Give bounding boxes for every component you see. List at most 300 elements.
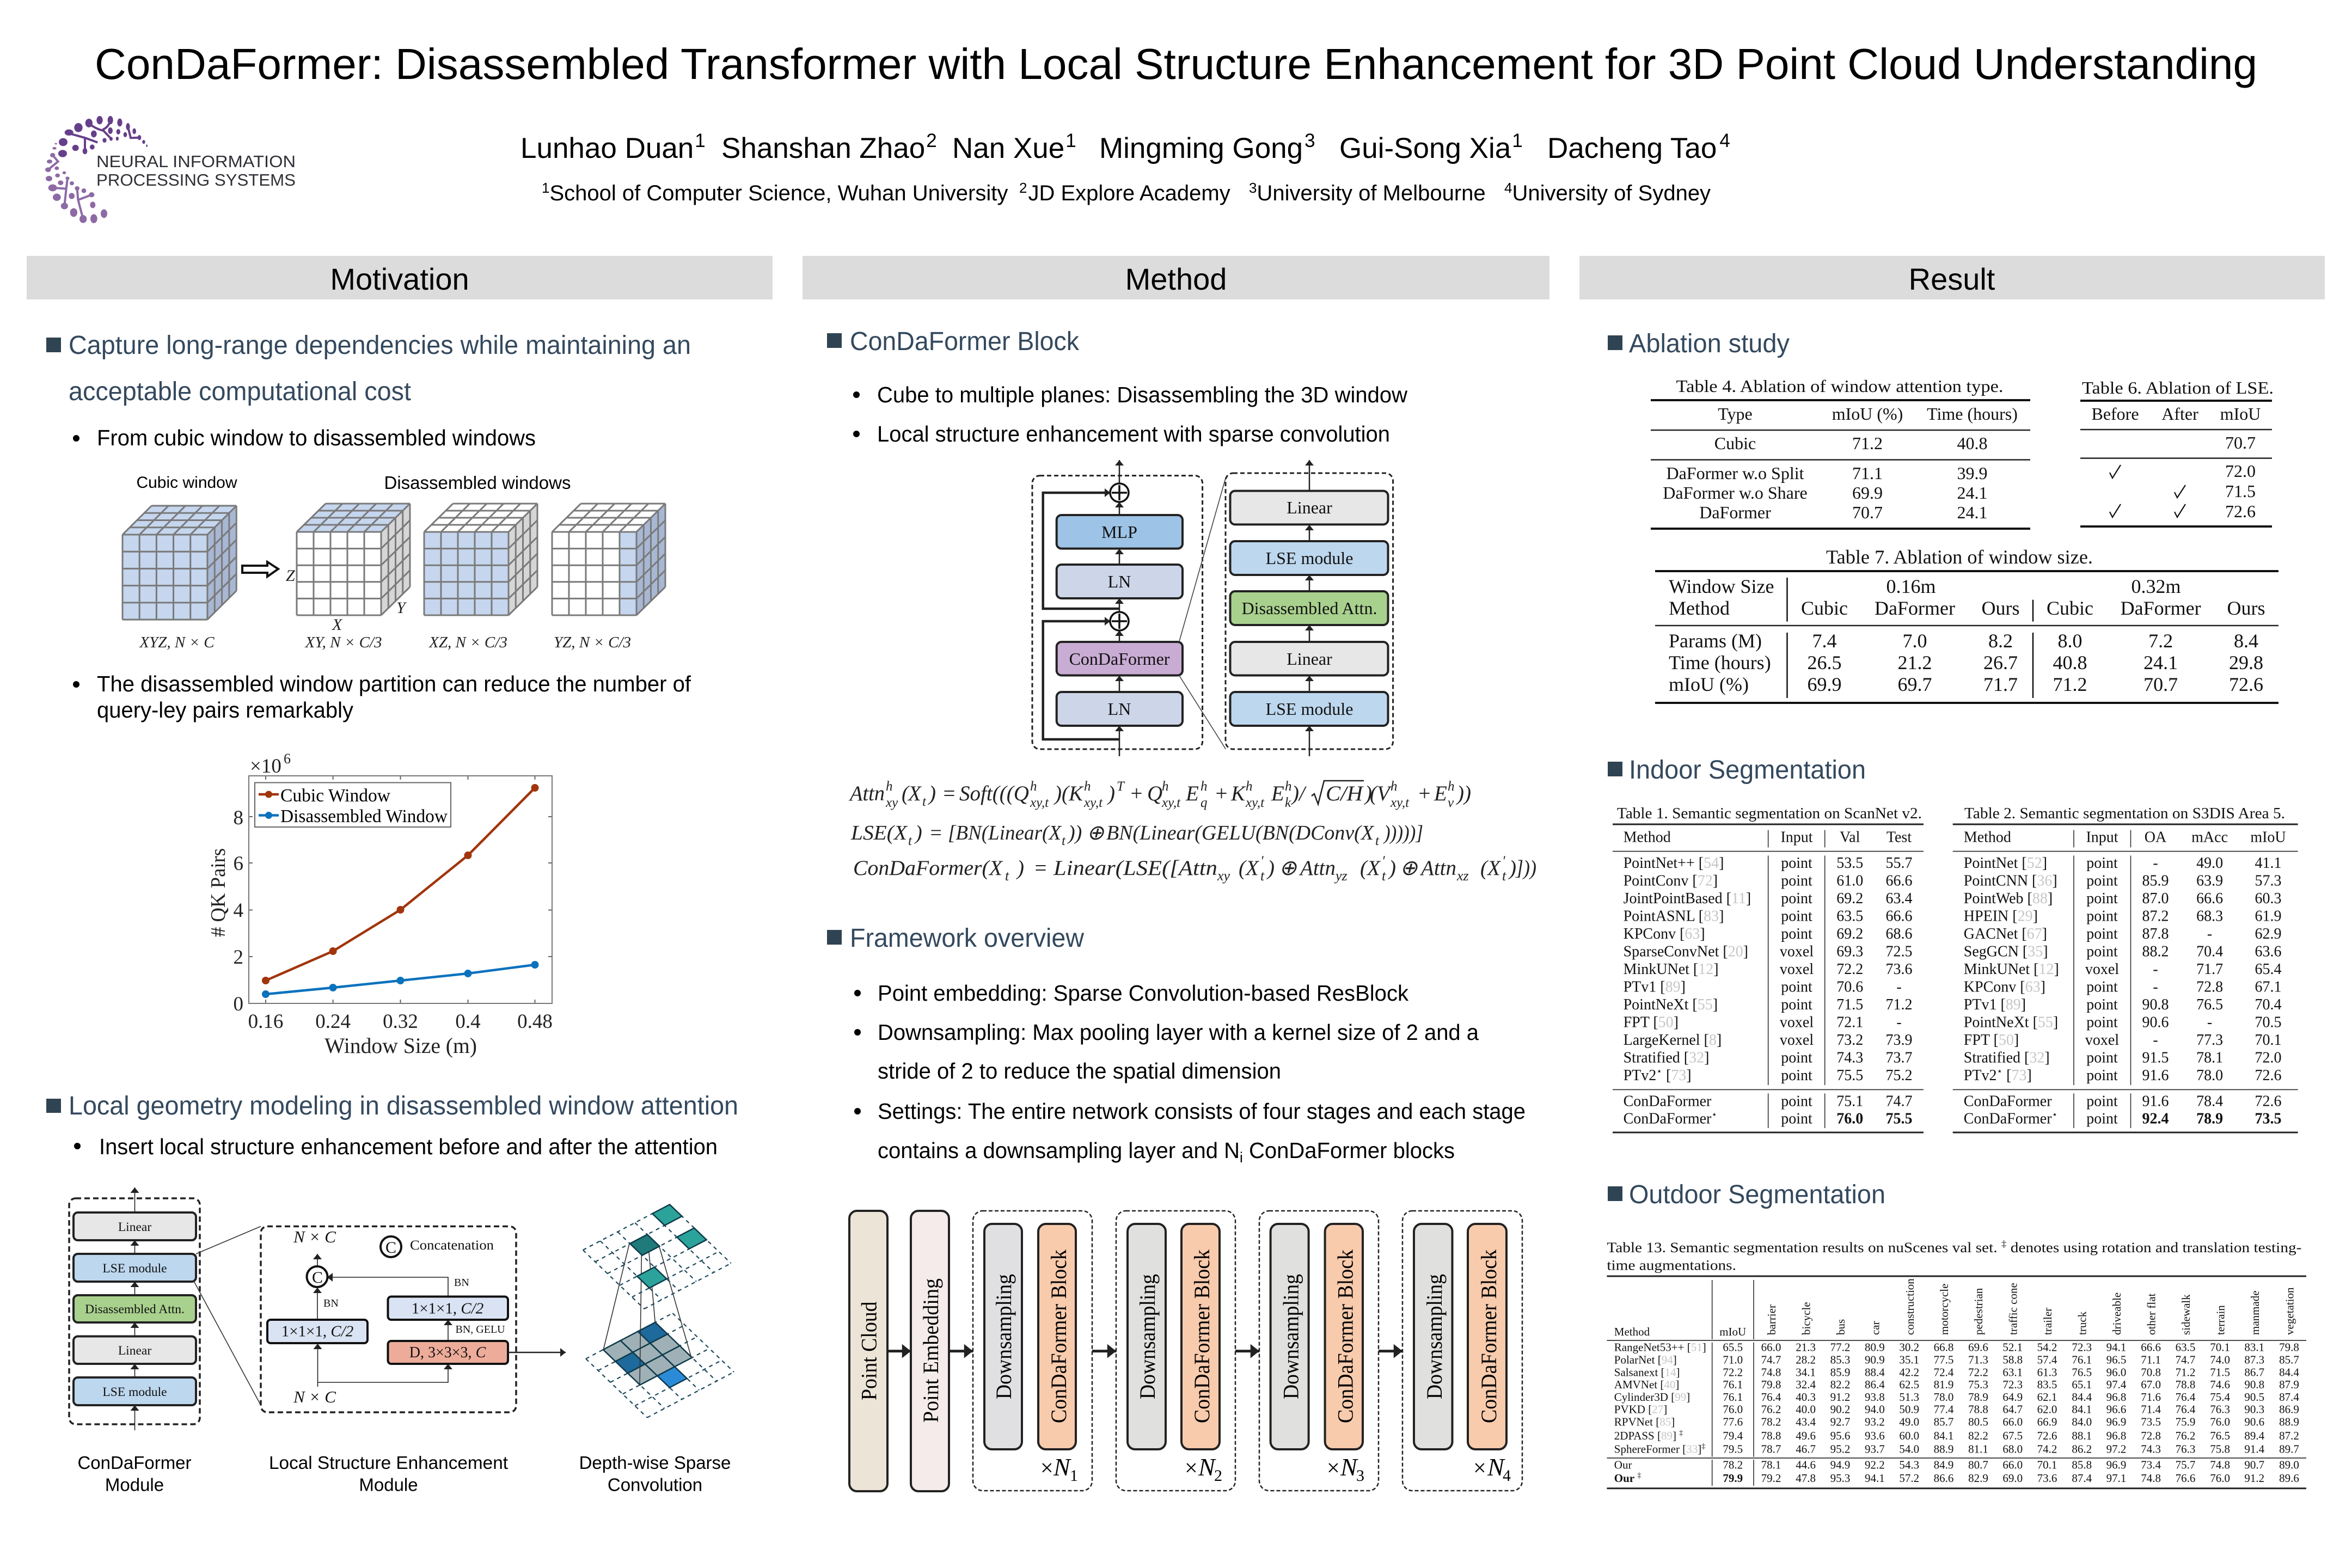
diagram: ConDaFormer module: LSE module <box>102 1261 167 1276</box>
series: disassembled window <box>262 961 539 998</box>
table 13: nuScenes: 76.0 <box>2210 1472 2230 1485</box>
table 13: nuScenes: 85.7 <box>1934 1416 1953 1429</box>
stage 2: ConDaFormer Block <box>1190 1250 1214 1423</box>
table 13: nuScenes: 84.4 <box>2279 1365 2299 1379</box>
diagram: ConDaFormer detail <box>1226 460 1393 756</box>
formula: LSE: [BN(Linear(X <box>948 822 1062 844</box>
table 7: window size: 8.2 <box>1988 630 2013 652</box>
formula: Attn: )/ <box>1291 782 1307 805</box>
table 1: ScanNet v2: 69.3 <box>1836 943 1863 960</box>
rotated column headers: car <box>1869 1321 1882 1335</box>
formula: LSE: t <box>1062 834 1066 848</box>
table 13: nuScenes: 21.3 <box>1796 1341 1816 1354</box>
formula: ConDaFormer: ) <box>1266 856 1275 880</box>
table 7: window size: 7.4 <box>1812 630 1837 652</box>
table 13: nuScenes: 65.1 <box>2072 1378 2092 1391</box>
table 13: nuScenes: 76.4 <box>2176 1391 2196 1404</box>
table 13: nuScenes: 74.8 <box>2210 1458 2230 1471</box>
table 13: nuScenes: 72.8 <box>2141 1429 2161 1442</box>
bullets: framework description: i <box>1240 1149 1243 1166</box>
figure: cubic and disassembled windows: XYZ, N × C <box>139 634 215 651</box>
formula: Attn: )) <box>1456 782 1471 805</box>
diagram: local structure enhancement module: 1×1×1, C/2 <box>412 1300 483 1318</box>
formula: ConDaFormer: t <box>1502 868 1506 884</box>
line chart: QK pairs vs window size: 0.24 <box>315 1010 351 1033</box>
table 1: ScanNet v2: JointPointBased [11] <box>1624 890 1751 907</box>
table 13: nuScenes: 71.0 <box>1723 1353 1743 1366</box>
formula: Attn: h <box>1084 779 1091 794</box>
formula: Attn: xy <box>885 795 898 810</box>
table 13: nuScenes: 88.1 <box>2072 1429 2092 1442</box>
table 13: nuScenes: 65.5 <box>1723 1341 1743 1354</box>
table 2: S3DIS Area 5: KPConv [63] <box>1964 978 2045 995</box>
diagram: ConDaFormer block: ConDaFormer <box>1069 649 1170 669</box>
table 2: S3DIS Area 5: GACNet [67] <box>1964 926 2047 942</box>
stage 3: Downsampling <box>1278 1274 1303 1399</box>
table 1: ScanNet v2: 61.0 <box>1836 872 1863 889</box>
table 13: nuScenes: 58.8 <box>2002 1353 2023 1366</box>
table 6: ablation of LSE: 72.6 <box>2225 501 2256 521</box>
table 1: ScanNet v2: 75.2 <box>1886 1067 1912 1084</box>
table 13: nuScenes: PolarNet [94] <box>1614 1353 1677 1366</box>
table 13: nuScenes: 75.4 <box>2210 1391 2230 1404</box>
table 1: ScanNet v2: ⋆ <box>1711 1110 1717 1120</box>
table 2: S3DIS Area 5: 41.1 <box>2255 855 2281 872</box>
diagram: depth-wise sparse convolution <box>583 1204 734 1418</box>
table 2: S3DIS Area 5: PointCNN [36] <box>1964 872 2057 889</box>
table 4: window attention type: 39.9 <box>1957 463 1987 483</box>
table 13: nuScenes: 85.9 <box>1830 1365 1850 1379</box>
table 4: window attention type: 24.1 <box>1957 503 1987 522</box>
table 1: ScanNet v2: 70.6 <box>1836 978 1863 995</box>
table 13: nuScenes: 71.1 <box>2141 1353 2161 1366</box>
table 2: S3DIS Area 5: Input <box>2086 829 2118 846</box>
table 2: S3DIS Area 5: - <box>2207 1014 2212 1031</box>
diagram: ConDaFormer detail: Disassembled Attn. <box>1242 598 1377 618</box>
line chart: QK pairs vs window size: 2 <box>233 946 243 969</box>
formula: Attn: xy,t <box>1083 795 1103 810</box>
table 1: ScanNet v2: 66.6 <box>1886 872 1912 889</box>
table 13: nuScenes: 92.2 <box>1865 1458 1885 1471</box>
formula: LSE: t <box>908 834 912 848</box>
table 7: window size: 26.5 <box>1808 652 1841 673</box>
table 13: nuScenes: ‡ <box>1701 1443 1705 1451</box>
table 1: ScanNet v2: point <box>1781 890 1812 907</box>
table 13: nuScenes: 84.9 <box>1934 1458 1953 1471</box>
table 13: nuScenes: 86.6 <box>1934 1472 1953 1485</box>
table 13: nuScenes: 78.7 <box>1761 1443 1781 1456</box>
rotated column headers: bus <box>1834 1319 1847 1335</box>
figure: cubic and disassembled windows <box>122 473 665 651</box>
diagram: ConDaFormer module: LSE module <box>102 1385 167 1399</box>
table 13: nuScenes: 52.1 <box>2002 1341 2023 1354</box>
table 13: nuScenes: 97.2 <box>2106 1443 2126 1456</box>
formula: Attn: ( <box>902 782 910 805</box>
table 2: S3DIS Area 5: 66.6 <box>2196 890 2223 907</box>
formula: Attn: (V <box>1370 782 1392 805</box>
table 13: nuScenes: 90.6 <box>2244 1416 2264 1429</box>
table 13: nuScenes: 67.0 <box>2141 1378 2161 1391</box>
diagram: local structure enhancement module: D, 3×3×3, C <box>409 1344 486 1361</box>
table 1: ScanNet v2: Input <box>1780 829 1813 846</box>
table 13: nuScenes: 90.5 <box>2244 1391 2264 1404</box>
table 2: S3DIS Area 5: point <box>2086 1093 2118 1110</box>
table 2: S3DIS Area 5: point <box>2086 978 2118 995</box>
table 2: S3DIS Area 5: point <box>2086 1049 2118 1066</box>
table 7: window size: 70.7 <box>2143 673 2178 695</box>
diagram: local structure enhancement module: BN <box>323 1297 339 1309</box>
table 4: window attention type: 71.1 <box>1852 463 1883 483</box>
table 13: nuScenes: 96.6 <box>2106 1403 2126 1416</box>
formula: ConDaFormer: Linear(LSE([Attn <box>1053 856 1217 880</box>
formula: ConDaFormer: ConDaFormer(X <box>853 856 1003 880</box>
panel: result <box>1579 256 2325 1489</box>
table 13: nuScenes: 73.6 <box>2037 1472 2057 1485</box>
diagram: local structure enhancement module: C <box>312 1269 323 1287</box>
table 13: nuScenes: 70.1 <box>2210 1341 2230 1354</box>
rotated column headers: sidewalk <box>2179 1294 2192 1335</box>
table 2: S3DIS Area 5: 87.0 <box>2142 890 2169 907</box>
icon: XY plane cube <box>297 504 410 615</box>
table 13: nuScenes: 66.6 <box>2141 1341 2161 1354</box>
line chart: QK pairs vs window size <box>207 751 553 1058</box>
diagram: local structure enhancement module <box>261 1226 516 1412</box>
callout lines: ConDaFormer to detail <box>1179 477 1226 749</box>
table 13: nuScenes: 42.2 <box>1899 1365 1919 1379</box>
table 1: ScanNet v2: 72.5 <box>1886 943 1912 960</box>
table 13: nuScenes: 72.3 <box>2002 1378 2023 1391</box>
table 13: nuScenes: 87.9 <box>2279 1378 2299 1391</box>
rotated column headers: traffic cone <box>2007 1283 2020 1335</box>
box: point cloud: Point Cloud <box>857 1301 881 1400</box>
table 2: S3DIS Area 5: 91.6 <box>2142 1093 2169 1110</box>
line chart: QK pairs vs window size: 0 <box>233 993 243 1015</box>
formula: LSE: LSE(X <box>850 822 908 844</box>
formula: LSE: )) <box>1067 822 1082 844</box>
rotated column headers: vegetation <box>2283 1287 2296 1335</box>
authors <box>520 130 1730 164</box>
table 13: nuScenes: 83.5 <box>2037 1378 2057 1391</box>
diagram: ConDaFormer block: LN <box>1108 572 1131 591</box>
table 13: nuScenes: 57.2 <box>1899 1472 1919 1485</box>
formula: Attn: xy,t <box>1030 795 1049 810</box>
table 7: window size: Cubic <box>2047 597 2093 619</box>
table 1: ScanNet v2: point <box>1781 1093 1812 1110</box>
rotated column headers: construction <box>1903 1278 1916 1335</box>
table 2: S3DIS Area 5: 71.7 <box>2196 961 2223 978</box>
rotated column headers: motorcycle <box>1938 1284 1951 1335</box>
diagram: ConDaFormer detail: Linear <box>1287 649 1332 669</box>
line chart: QK pairs vs window size: 8 <box>233 807 243 829</box>
bullets: framework description: stride of 2 to reduce the spatial dimension <box>878 1058 1281 1083</box>
table 1: ScanNet v2: KPConv [63] <box>1624 926 1705 942</box>
table 2: S3DIS Area 5: 70.5 <box>2255 1014 2281 1031</box>
table 13: nuScenes: 62.5 <box>1899 1378 1919 1391</box>
table 13: nuScenes: 76.2 <box>1761 1403 1781 1416</box>
figure: cubic and disassembled windows: XZ, N × C/3 <box>428 634 507 651</box>
table 2: S3DIS Area 5: mIoU <box>2250 829 2286 846</box>
formula: Attn: t <box>922 794 927 809</box>
table 1: ScanNet v2: - <box>1896 1014 1902 1031</box>
table 13: nuScenes: 74.8 <box>1761 1365 1781 1379</box>
formula: Attn: h <box>1448 779 1455 794</box>
table 13: nuScenes: 79.4 <box>1723 1429 1743 1442</box>
table 4: window attention type: 71.2 <box>1852 433 1883 453</box>
table 2: S3DIS Area 5: PointWeb [88] <box>1964 890 2053 907</box>
table 13: nuScenes: 40.0 <box>1796 1403 1816 1416</box>
box: point embedding: Point Embedding <box>918 1278 943 1423</box>
table 1: ScanNet v2: 73.6 <box>1886 961 1912 978</box>
table 13: nuScenes: 76.0 <box>2210 1416 2230 1429</box>
panel: method <box>803 256 1549 1491</box>
table 13: nuScenes: 94.1 <box>1865 1472 1885 1485</box>
table 2: S3DIS Area 5: point <box>2086 1067 2118 1084</box>
formula: ConDaFormer: yz <box>1334 868 1347 884</box>
table 2: S3DIS Area 5: mAcc <box>2191 829 2228 846</box>
table 13: nuScenes: 72.3 <box>2072 1341 2092 1354</box>
table 1: ScanNet v2: Stratified [32] <box>1624 1049 1709 1066</box>
legend <box>255 783 451 827</box>
table 2: S3DIS Area 5: 65.4 <box>2255 961 2281 978</box>
authors: Dacheng Tao <box>1547 132 1717 164</box>
table 13: nuScenes: 94.1 <box>2106 1341 2126 1354</box>
table 13: nuScenes: 95.3 <box>1830 1472 1850 1485</box>
table 13: nuScenes: Our <box>1614 1458 1632 1471</box>
table 13: nuScenes: 71.5 <box>2210 1365 2230 1379</box>
table 13: nuScenes: 92.7 <box>1830 1416 1850 1429</box>
table 13: nuScenes: 71.2 <box>2176 1365 2195 1379</box>
line chart: QK pairs vs window size: 0.4 <box>455 1010 481 1033</box>
formula: Attn: ) <box>928 782 936 805</box>
table 13: nuScenes: 79.2 <box>1761 1472 1781 1485</box>
callout lines: zoom to LSE module <box>194 1226 261 1405</box>
affiliations: University of Sydney <box>1512 181 1711 205</box>
table 6: ablation of LSE: After <box>2161 404 2198 424</box>
table 13: nuScenes: 70.8 <box>2141 1365 2161 1379</box>
table 1: ScanNet v2: LargeKernel [8] <box>1624 1032 1722 1049</box>
table 1: ScanNet v2: 73] <box>1671 1067 1692 1084</box>
table 13: nuScenes: 66.9 <box>2037 1416 2057 1429</box>
formula: ConDaFormer: ⊕ <box>1279 856 1297 880</box>
table 2: S3DIS Area 5: 68.3 <box>2196 908 2223 924</box>
table 2: S3DIS Area 5: 67.1 <box>2255 978 2281 995</box>
table 6: ablation of LSE: 71.5 <box>2225 481 2256 501</box>
table 6: ablation of LSE: mIoU <box>2220 404 2261 424</box>
line chart: QK pairs vs window size: ×10 <box>250 755 281 777</box>
table 13: nuScenes: 54.3 <box>1899 1458 1919 1471</box>
formula: ConDaFormer: ) <box>1388 856 1396 880</box>
table 13: nuScenes: ‡ <box>2001 1239 2006 1249</box>
table 13: nuScenes: Our <box>1614 1472 1634 1485</box>
diagram: ConDaFormer detail: Linear <box>1287 498 1332 517</box>
table 13: nuScenes: RPVNet [85] <box>1614 1416 1675 1429</box>
table 13: nuScenes: 75.3 <box>1968 1378 1988 1391</box>
table 2: S3DIS Area 5: 70.4 <box>2255 996 2281 1013</box>
formula: Attn: h <box>1030 779 1037 794</box>
table 2: S3DIS Area 5: - <box>2207 926 2212 942</box>
table 13: nuScenes: 47.8 <box>1796 1472 1816 1485</box>
figure: cubic and disassembled windows: XY, N × C/3 <box>305 634 382 651</box>
table 7: window size: 69.9 <box>1808 673 1841 695</box>
table 2: S3DIS Area 5: point <box>2086 943 2118 960</box>
table 13: nuScenes: 64.9 <box>2002 1391 2023 1404</box>
formula: Attn: T <box>1117 779 1125 794</box>
table 13: nuScenes: 72.4 <box>1934 1365 1954 1379</box>
formula: LSE: = <box>929 822 943 844</box>
table 1: ScanNet v2: SparseConvNet [20] <box>1624 943 1748 960</box>
table 4: window attention type: mIoU (%) <box>1832 404 1903 424</box>
table 4: window attention type: 69.9 <box>1852 483 1883 503</box>
stage 2: Downsampling <box>1135 1274 1160 1399</box>
table 13: nuScenes: 95.6 <box>1830 1429 1850 1442</box>
table 7: window size: 69.7 <box>1898 673 1932 695</box>
table 13: nuScenes: 71.4 <box>2141 1403 2161 1416</box>
table 2: S3DIS Area 5: HPEIN [29] <box>1964 908 2038 924</box>
table 13: nuScenes: 76.3 <box>2210 1403 2230 1416</box>
table 7: window size: Ours <box>1982 597 2020 619</box>
table 13: nuScenes: 93.6 <box>1865 1429 1885 1442</box>
table 2: S3DIS Area 5: 73.5 <box>2255 1111 2281 1128</box>
table 2: S3DIS Area 5: point <box>2086 1014 2118 1031</box>
table 2: S3DIS Area 5: 72.6 <box>2255 1067 2281 1084</box>
table 13: nuScenes: 89.7 <box>2279 1443 2299 1456</box>
diagram: local structure enhancement module: BN <box>454 1277 469 1289</box>
table 1: ScanNet v2: 69.2 <box>1836 926 1863 942</box>
arrow: LSE to sparse convolution <box>508 1352 566 1353</box>
bullets: block description: Local structure enhancement with sparse convolution <box>877 421 1390 446</box>
table 2: S3DIS Area 5: SegGCN [35] <box>1964 943 2048 960</box>
line chart: QK pairs vs window size: 0.16 <box>248 1010 283 1033</box>
table 13: nuScenes: mIoU <box>1719 1325 1746 1338</box>
bullet: disassembled partition <box>73 671 691 722</box>
formula: Attn: K <box>1230 782 1246 805</box>
table 1: ScanNet v2: voxel <box>1780 1032 1814 1049</box>
table 13: nuScenes: 76.3 <box>2176 1443 2195 1456</box>
table 13: nuScenes: 44.6 <box>1796 1458 1816 1471</box>
table 13: nuScenes: 63.5 <box>2176 1341 2195 1354</box>
table 13: nuScenes: 76.4 <box>2176 1403 2196 1416</box>
table 13: nuScenes: 75.8 <box>2210 1443 2230 1456</box>
table 2: S3DIS Area 5: PointNeXt [55] <box>1964 1014 2058 1031</box>
table 13: nuScenes: 46.7 <box>1796 1443 1816 1456</box>
formula: Attn: k <box>1285 795 1291 810</box>
rotated column headers: manmade <box>2249 1290 2262 1335</box>
stage 4: 4 <box>1503 1467 1511 1485</box>
section header: Motivation: Motivation <box>330 262 469 296</box>
diagram: ConDaFormer block: LN <box>1108 699 1131 719</box>
table 13: nuScenes: 91.4 <box>2244 1443 2265 1456</box>
table 2: S3DIS Area 5: 61.9 <box>2255 908 2281 924</box>
captions under diagrams: Convolution <box>608 1474 702 1495</box>
table 13: nuScenes: 67.5 <box>2002 1429 2023 1442</box>
table 7: window size: 0.32m <box>2131 575 2181 597</box>
table 1: ScanNet v2: point <box>1781 978 1812 995</box>
bullets: framework description: Point embedding: Sparse Convolution-based ResBlock <box>878 981 1408 1006</box>
table 2: S3DIS Area 5: ConDaFormer <box>1964 1111 2052 1128</box>
table 13: nuScenes: 66.8 <box>1934 1341 1953 1354</box>
box: point cloud <box>849 1211 887 1491</box>
table 13: nuScenes: 30.2 <box>1899 1341 1919 1354</box>
stage 2: 2 <box>1214 1467 1222 1485</box>
table 4: window attention type: 40.8 <box>1957 433 1987 453</box>
table 7: window size: 24.1 <box>2143 652 2178 673</box>
formula: ConDaFormer: ])) <box>1515 856 1536 880</box>
table 1: ScanNet v2: FPT [50] <box>1624 1014 1679 1031</box>
table 2: S3DIS Area 5: 72.0 <box>2255 1049 2281 1066</box>
bullet: disassembled partition: query-ley pairs remarkably <box>97 697 353 722</box>
table 13: nuScenes: 82.9 <box>1968 1472 1988 1485</box>
table 13: nuScenes: 69.0 <box>2002 1472 2023 1485</box>
bullet: insert LSE: Insert local structure enhancement before and after the attention <box>99 1134 718 1159</box>
table 13: nuScenes: 94.9 <box>1830 1458 1850 1471</box>
table 2: S3DIS Area 5: point <box>2086 996 2118 1013</box>
table 7: window size: Ours <box>2227 597 2265 619</box>
table 7: window size: Window Size <box>1669 575 1774 597</box>
table 1: ScanNet v2: PointASNL [83] <box>1624 908 1724 924</box>
table 2: S3DIS Area 5: 63.9 <box>2196 872 2223 889</box>
table 13: nuScenes: 82.2 <box>1968 1429 1988 1442</box>
table 13: nuScenes: 50.9 <box>1899 1403 1919 1416</box>
table 1: ScanNet v2: MinkUNet [12] <box>1624 961 1719 978</box>
formula: LSE: BN(Linear(GELU(BN(DConv(X <box>1106 822 1375 844</box>
bullets: block description <box>853 382 1407 446</box>
table 13: nuScenes: 63.1 <box>2002 1365 2023 1379</box>
table 2: S3DIS Area 5: 60.3 <box>2255 890 2281 907</box>
formula: Attn: ) <box>1107 782 1115 805</box>
table 13: nuScenes: 81.9 <box>1934 1378 1953 1391</box>
table 7: window size: 8.0 <box>2058 630 2082 652</box>
table 13: nuScenes <box>1607 1239 2306 1489</box>
table 13: nuScenes: 76.5 <box>2210 1429 2230 1442</box>
bullets: framework description <box>854 981 1526 1166</box>
table 13: nuScenes: 87.4 <box>2072 1472 2092 1485</box>
table 13: nuScenes: 75.9 <box>2176 1416 2195 1429</box>
table 13: nuScenes: 97.4 <box>2106 1378 2127 1391</box>
stage 1: × <box>1040 1456 1054 1481</box>
authors: 1 <box>1512 130 1523 151</box>
table 13: nuScenes: 32.4 <box>1796 1378 1816 1391</box>
stage 4: N <box>1487 1453 1505 1481</box>
table 1: ScanNet v2: point <box>1781 1049 1812 1066</box>
rotated column headers <box>1765 1278 2296 1335</box>
table 13: nuScenes: SphereFormer [33] <box>1614 1443 1701 1456</box>
formula: Attn: C/H <box>1326 782 1364 805</box>
formula: Attn: )(K <box>1054 782 1084 805</box>
table 13: nuScenes: ‡ <box>1679 1429 1683 1437</box>
table 13: nuScenes: 51.3 <box>1899 1391 1919 1404</box>
table 13: nuScenes: 86.7 <box>2244 1365 2264 1379</box>
formula: ConDaFormer: xy <box>1217 868 1230 884</box>
section header: Method: Method <box>1125 262 1227 296</box>
table 13: nuScenes: 76.1 <box>1723 1391 1743 1404</box>
table 2: S3DIS Area 5: 70.4 <box>2196 943 2223 960</box>
table 13: nuScenes: 88.9 <box>1934 1443 1953 1456</box>
table 1: ScanNet v2: 69.2 <box>1836 890 1863 907</box>
table 13: nuScenes: 57.4 <box>2037 1353 2057 1366</box>
icon: sum nodes <box>1110 483 1129 630</box>
table 7: window size: 40.8 <box>2053 652 2087 673</box>
table 2: S3DIS Area 5: 72.6 <box>2255 1093 2281 1110</box>
stage 1: 1 <box>1070 1467 1078 1485</box>
diagram: local structure enhancement module: 1×1×1, C/2 <box>281 1323 353 1340</box>
table 13: nuScenes: 82.2 <box>1830 1378 1850 1391</box>
table 2: S3DIS Area 5: FPT [50] <box>1964 1032 2019 1049</box>
table 13: nuScenes: 64.7 <box>2002 1403 2023 1416</box>
table 2: S3DIS Area 5: 49.0 <box>2196 855 2223 872</box>
table 2: S3DIS Area 5: Stratified [32] <box>1964 1049 2050 1066</box>
table 1: ScanNet v2: 75.5 <box>1886 1111 1912 1128</box>
table 7: window size: 8.4 <box>2234 630 2258 652</box>
